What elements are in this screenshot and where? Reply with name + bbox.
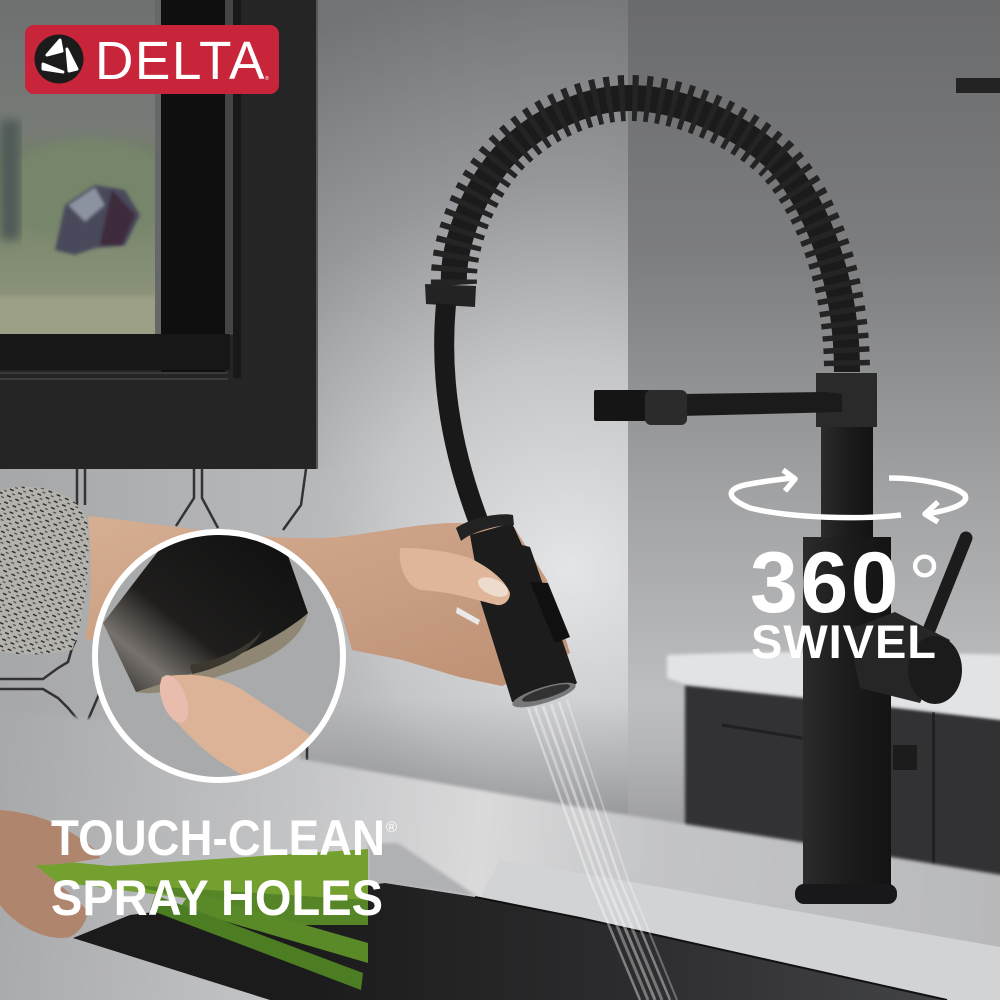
thumb over spray head bbox=[400, 548, 510, 605]
handle bbox=[848, 538, 966, 704]
arm and hand bbox=[85, 516, 570, 686]
left hand holding greens bbox=[0, 810, 100, 938]
faucet bbox=[425, 98, 966, 904]
background wall: left bbox=[0, 0, 630, 1000]
upper stem bbox=[821, 427, 873, 542]
shelf at top right bbox=[956, 78, 1000, 93]
backsplash tile bbox=[0, 469, 400, 769]
green onions bbox=[30, 849, 368, 990]
countertop, foreground bbox=[0, 712, 1000, 1000]
icon: swivel rotation arrows bbox=[731, 470, 966, 522]
water spray bbox=[528, 700, 677, 1000]
text: 360 swivel: SWIVEL bbox=[751, 615, 936, 668]
sink corner shadow bbox=[368, 843, 478, 897]
inset circle: touch-clean detail bbox=[95, 528, 343, 780]
logo: Delta bbox=[25, 25, 279, 94]
window bbox=[0, 0, 318, 469]
countertop front lip bbox=[480, 860, 1000, 1000]
lever arm bbox=[594, 390, 842, 425]
spray face bbox=[510, 678, 578, 712]
logo: Delta: DELTA bbox=[95, 31, 266, 91]
text: touch-clean spray holes bbox=[51, 810, 397, 926]
spray toggle bbox=[530, 582, 570, 643]
sleeve bbox=[0, 487, 89, 654]
text: touch-clean spray holes: ® bbox=[386, 819, 397, 836]
collar ring bbox=[456, 514, 514, 541]
wall shadow above counter bbox=[300, 700, 690, 825]
backsplash tile lines bbox=[0, 469, 307, 760]
gap between fingers bbox=[456, 607, 480, 625]
window view bbox=[0, 0, 155, 334]
fingernail bbox=[475, 573, 511, 601]
hose bbox=[444, 304, 478, 520]
text: touch-clean spray holes: TOUCH-CLEAN bbox=[51, 810, 385, 866]
logo: Delta: ® bbox=[265, 75, 269, 82]
text: 360 swivel: ° bbox=[908, 537, 941, 630]
background wall: right bbox=[628, 0, 1000, 1000]
text: 360 swivel bbox=[750, 535, 941, 668]
spray head bbox=[456, 514, 578, 712]
back cabinets and counter bbox=[667, 652, 1000, 890]
icon: Delta triangle mark bbox=[34, 34, 84, 84]
base bbox=[795, 884, 897, 904]
sink bbox=[73, 883, 947, 1000]
spring coil bbox=[454, 98, 847, 372]
swivel collar bbox=[816, 373, 877, 427]
main body bbox=[803, 537, 891, 887]
text: 360 swivel: 360 bbox=[750, 535, 901, 631]
spring collar bbox=[425, 284, 476, 307]
text: touch-clean spray holes: SPRAY HOLES bbox=[51, 870, 383, 926]
